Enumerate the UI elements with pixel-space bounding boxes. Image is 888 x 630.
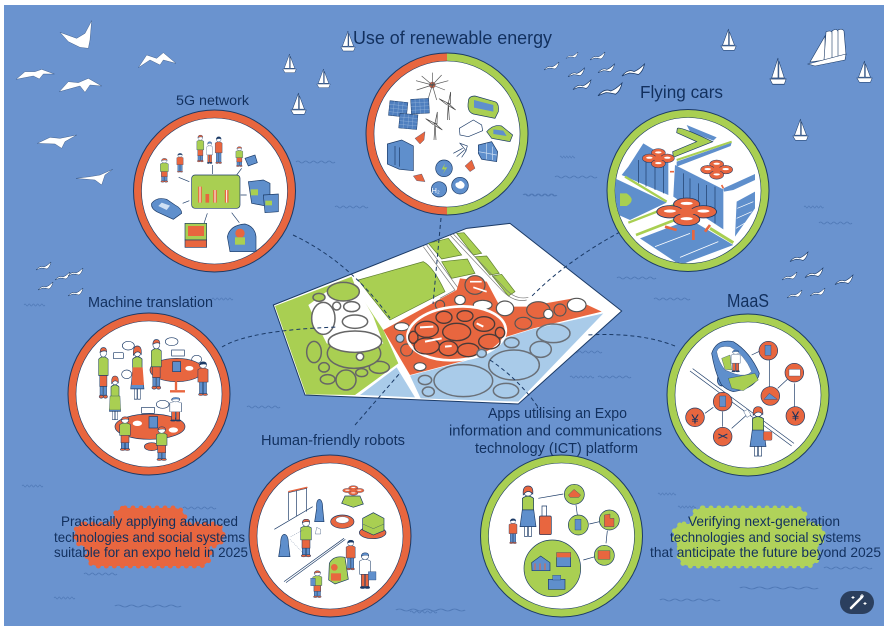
yen labels: ¥: [791, 408, 800, 424]
map: white oval plaza: [405, 302, 508, 364]
robots illustration: [274, 486, 386, 598]
yen labels: ¥: [690, 412, 699, 426]
map: water rings: [418, 324, 570, 398]
MaaS heading: MaaS: [727, 291, 769, 311]
red callout text: technologies and social systems: [54, 529, 245, 545]
map: west zone rings: [307, 293, 389, 390]
map: light-blue triangle: [360, 367, 415, 397]
flying cars heading: Flying cars: [640, 82, 723, 102]
panel: apps / ICT platform: [449, 406, 662, 617]
birds: large seagulls: [16, 21, 176, 185]
panel: human-friendly robots: [249, 433, 411, 617]
text: use of renewable energy heading: Use of renewable energy: [353, 28, 552, 48]
apps illustration: [509, 484, 619, 597]
dashed connector lines: [222, 218, 675, 425]
callout: green blob with next-generation text: [650, 508, 881, 566]
yen labels: [690, 408, 800, 426]
ring: red half: [370, 57, 447, 211]
renewable energy illustrations: [387, 73, 513, 197]
map: red zone pattern: [394, 276, 586, 371]
MaaS illustration: [686, 341, 805, 456]
apps heading: technology (ICT) platform: [475, 441, 638, 457]
machine translation heading: Machine translation: [88, 294, 213, 311]
map: green west zone: [275, 277, 398, 395]
label: H2: H₂: [432, 186, 440, 195]
5G heading: 5G network: [176, 93, 249, 108]
panel: renewable energy: [366, 53, 528, 215]
schooner: [808, 29, 846, 66]
apps heading: Apps utilising an Expo: [488, 406, 627, 422]
map: green plots: [428, 233, 515, 296]
icon: magic wand button: [840, 591, 874, 614]
ring: green half: [447, 57, 524, 211]
flying cars illustration: [615, 125, 755, 265]
machine translation illustration: [99, 338, 208, 461]
map: red central zone: [383, 278, 602, 375]
callout: red blob with advanced technologies text: [54, 508, 248, 566]
red callout text: suitable for an expo held in 2025: [54, 544, 248, 560]
panel: MaaS: [667, 291, 829, 476]
map: light-blue water zone: [410, 313, 603, 402]
map: white paths in west zone: [308, 287, 383, 350]
robots heading: Human-friendly robots: [261, 433, 405, 449]
apps heading: information and communications: [449, 424, 662, 440]
green callout text: that anticipate the future beyond 2025: [650, 544, 881, 560]
panel: 5G network: [134, 93, 296, 272]
panel: machine translation: [68, 294, 230, 475]
panel: flying cars: [607, 82, 769, 272]
green callout text: Verifying next-generation: [688, 513, 840, 529]
5G illustrations: [152, 135, 278, 252]
map: green park: [358, 262, 445, 320]
green callout text: technologies and social systems: [670, 529, 861, 545]
birds: small flocks: [36, 52, 853, 298]
central site map: [273, 223, 622, 404]
map: walkway lines: [423, 234, 528, 301]
sailboats: [283, 29, 872, 140]
wave marks: [22, 156, 872, 613]
red callout text: Practically applying advanced: [61, 513, 238, 529]
